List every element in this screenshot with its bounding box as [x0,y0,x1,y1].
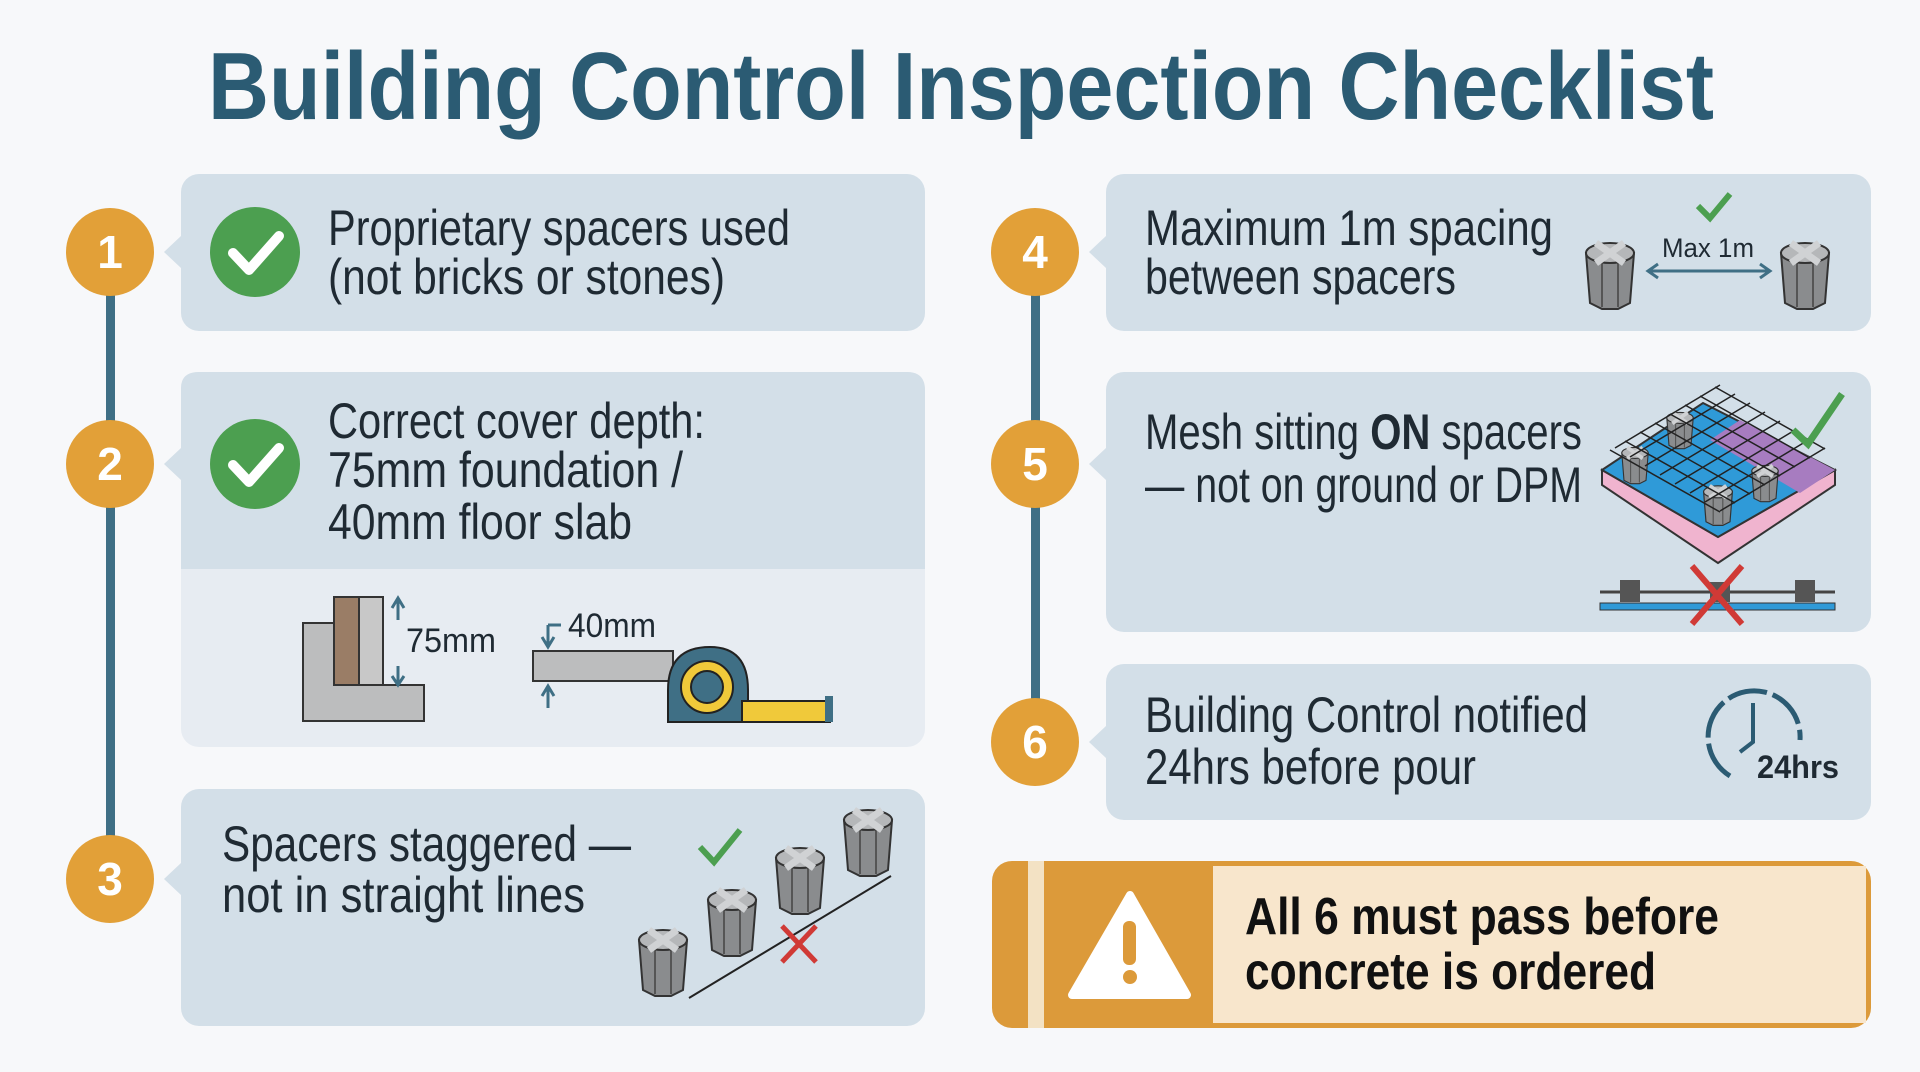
text: warning [1245,888,1719,1001]
text: panel 2: 40mm floor slab [328,494,632,550]
text: panel 1 [328,200,790,305]
text: warning: All 6 must pass before [1245,888,1719,946]
number circles: 6 [1022,716,1048,768]
panel 5 [1089,372,1871,632]
text: panel 4: Maximum 1m spacing [1145,200,1553,256]
icon: clock 24hrs [1708,691,1839,785]
number circles: 4 [1022,226,1048,278]
panel 4 [1089,174,1871,331]
text: panel 6: 24hrs before pour [1145,739,1476,795]
text: panel 5: Mesh sitting ON spacers [1145,404,1582,460]
illustration: max 1m [1586,194,1829,309]
number circles: 5 [1022,438,1048,490]
text: panel 4: between spacers [1145,249,1456,305]
panel 1 [164,174,925,331]
illustration: staggered spacers [639,810,892,998]
text: panel 1: (not bricks or stones) [328,249,725,305]
icon: warning triangle [1072,895,1187,995]
text: panel 3: Spacers staggered — [222,816,631,872]
text: panel 6 [1145,687,1588,795]
text: panel 6: Building Control notified [1145,687,1588,743]
timeline: right [1031,252,1040,742]
icon: clock 24hrs: 24hrs [1757,749,1839,785]
text: panel 3 [222,816,631,923]
text: panel 5 [1145,404,1582,513]
panel 6 [1089,664,1871,820]
icon: check 1 [210,207,300,297]
icon: check 2 [210,419,300,509]
text: panel 2: 75mm foundation / [328,442,683,498]
timeline: left [106,252,115,879]
illustration: foundation 75mm [303,597,496,721]
warning callout [992,861,1871,1028]
illustration: mesh on spacers [1600,385,1842,624]
illustration: foundation 75mm: 75mm [406,622,496,660]
illustration: slab 40mm and tape measure: 40mm [568,607,656,645]
number circles: 3 [97,853,123,905]
number circles [66,208,1079,923]
panel 2 [164,372,925,747]
text: panel 5: — not on ground or DPM [1145,457,1582,513]
text: panel 2 [328,393,705,550]
text: panel 3: not in straight lines [222,867,585,923]
text: panel 4 [1145,200,1553,305]
illustration: max 1m: Max 1m [1662,233,1754,263]
text: panel 2: Correct cover depth: [328,393,705,449]
title: Building Control Inspection Checklist [208,33,1714,140]
number circles: 1 [97,226,123,278]
text: panel 1: Proprietary spacers used [328,200,790,256]
panel 3 [164,789,925,1026]
illustration: slab 40mm and tape measure [533,607,833,722]
text: warning: concrete is ordered [1245,943,1656,1001]
number circles: 2 [97,438,123,490]
